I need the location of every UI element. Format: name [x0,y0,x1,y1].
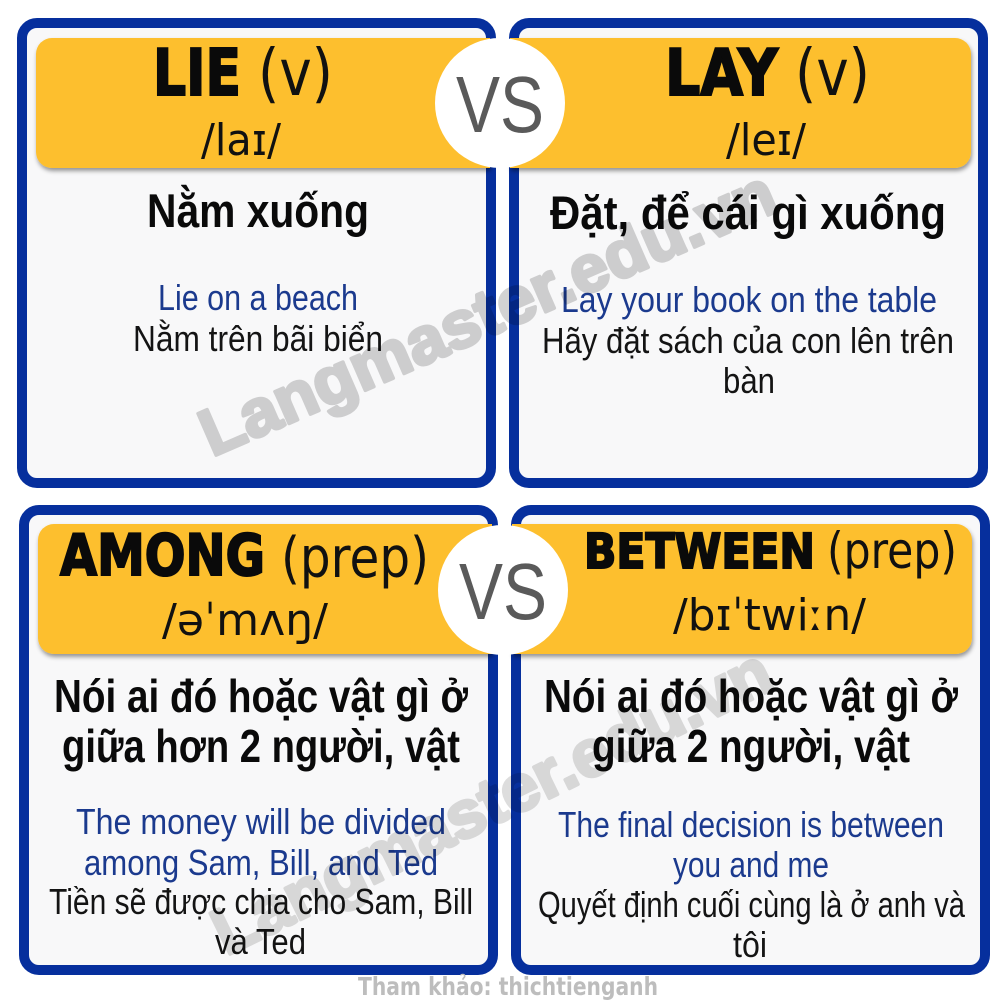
definition: between: giữa 2 người, vật [592,720,910,772]
example: among: The money will be divided [76,801,446,842]
header band: LAY [510,37,971,168]
definition: lay: Đặt, để cái gì xuống [550,186,946,239]
header band: BETWEEN [512,522,972,654]
pronunciation: between: /bɪˈtwiːn/ [673,590,866,641]
example: between: tôi [733,924,767,965]
header band: AMONG [38,523,492,654]
panel: AMONG [24,510,493,970]
example: lie: Lie on a beach [158,277,358,318]
watermark: bottom: Langmaster.edu.vn [200,633,783,969]
badge: VS top: VS [456,60,544,149]
source credit: Tham khảo: thichtienganh [358,972,658,1001]
definition: among: giữa hơn 2 người, vật [62,720,460,772]
panel: LIE [22,23,491,483]
example: lay: bàn [723,360,775,401]
panel: LAY [510,23,983,483]
part of speech: v: (v) [258,37,333,111]
panel: BETWEEN [512,510,985,970]
word: LIE: LIE [153,37,241,111]
badge: VS bottom [438,525,568,655]
part of speech: prep: (prep) [281,526,429,591]
definition: among [54,670,468,772]
word: AMONG: AMONG [60,523,265,589]
definition: among: Nói ai đó hoặc vật gì ở [54,670,468,722]
pronunciation: lie: /laɪ/ [201,115,281,166]
definition: between [544,670,958,772]
example: among: among Sam, Bill, and Ted [84,842,438,883]
example: lay [542,279,954,401]
pronunciation: lay: /leɪ/ [726,115,806,166]
example: lay: Lay your book on the table [561,279,937,320]
example: lie: Nằm trên bãi biển [133,318,383,359]
word: LAY: LAY [665,37,779,111]
watermark: top: Langmaster.edu.vn [188,155,786,470]
example: among: Tiền sẽ được chia cho Sam, Bill [49,881,473,922]
part of speech: prep: (prep) [827,522,957,580]
header band: LIE [36,37,490,168]
definition: lie: Nằm xuống [147,184,369,237]
pronunciation: among: /əˈmʌŋ/ [162,595,328,646]
example: among: và Ted [215,921,306,962]
example: lie [133,277,383,359]
badge: VS bottom: VS [459,547,547,636]
example: between: you and me [673,844,829,885]
badge: VS top [435,38,565,168]
word: BETWEEN: BETWEEN [584,524,815,580]
example: between [538,804,966,965]
example: among [49,801,473,962]
part of speech: v: (v) [795,37,870,111]
